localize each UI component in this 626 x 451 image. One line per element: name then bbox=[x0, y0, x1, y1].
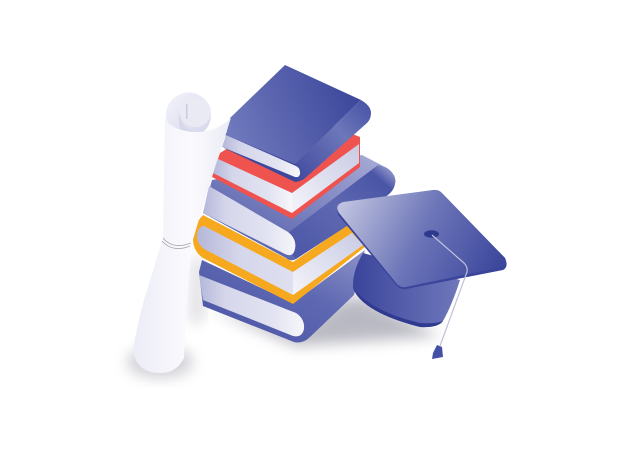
cap body bbox=[353, 253, 460, 327]
book: red bbox=[212, 110, 360, 219]
shadow: beside scroll bbox=[190, 255, 204, 325]
scroll ribbon bbox=[162, 238, 191, 249]
tassel bbox=[432, 345, 443, 359]
graduation cap bbox=[337, 190, 507, 359]
cap board bbox=[337, 191, 507, 289]
book: middle blue bbox=[203, 155, 395, 260]
book: top blue bbox=[222, 65, 371, 182]
scroll sheet bbox=[133, 117, 231, 373]
shadow: ground under books and cap bbox=[208, 296, 440, 346]
tassel cord bbox=[432, 235, 467, 346]
book: bottom blue bbox=[199, 250, 365, 342]
shadow: ground under scroll bbox=[127, 346, 193, 378]
scroll curl bbox=[166, 92, 211, 138]
cap button bbox=[424, 230, 439, 238]
book: orange bbox=[193, 215, 366, 304]
diploma scroll bbox=[133, 92, 231, 373]
